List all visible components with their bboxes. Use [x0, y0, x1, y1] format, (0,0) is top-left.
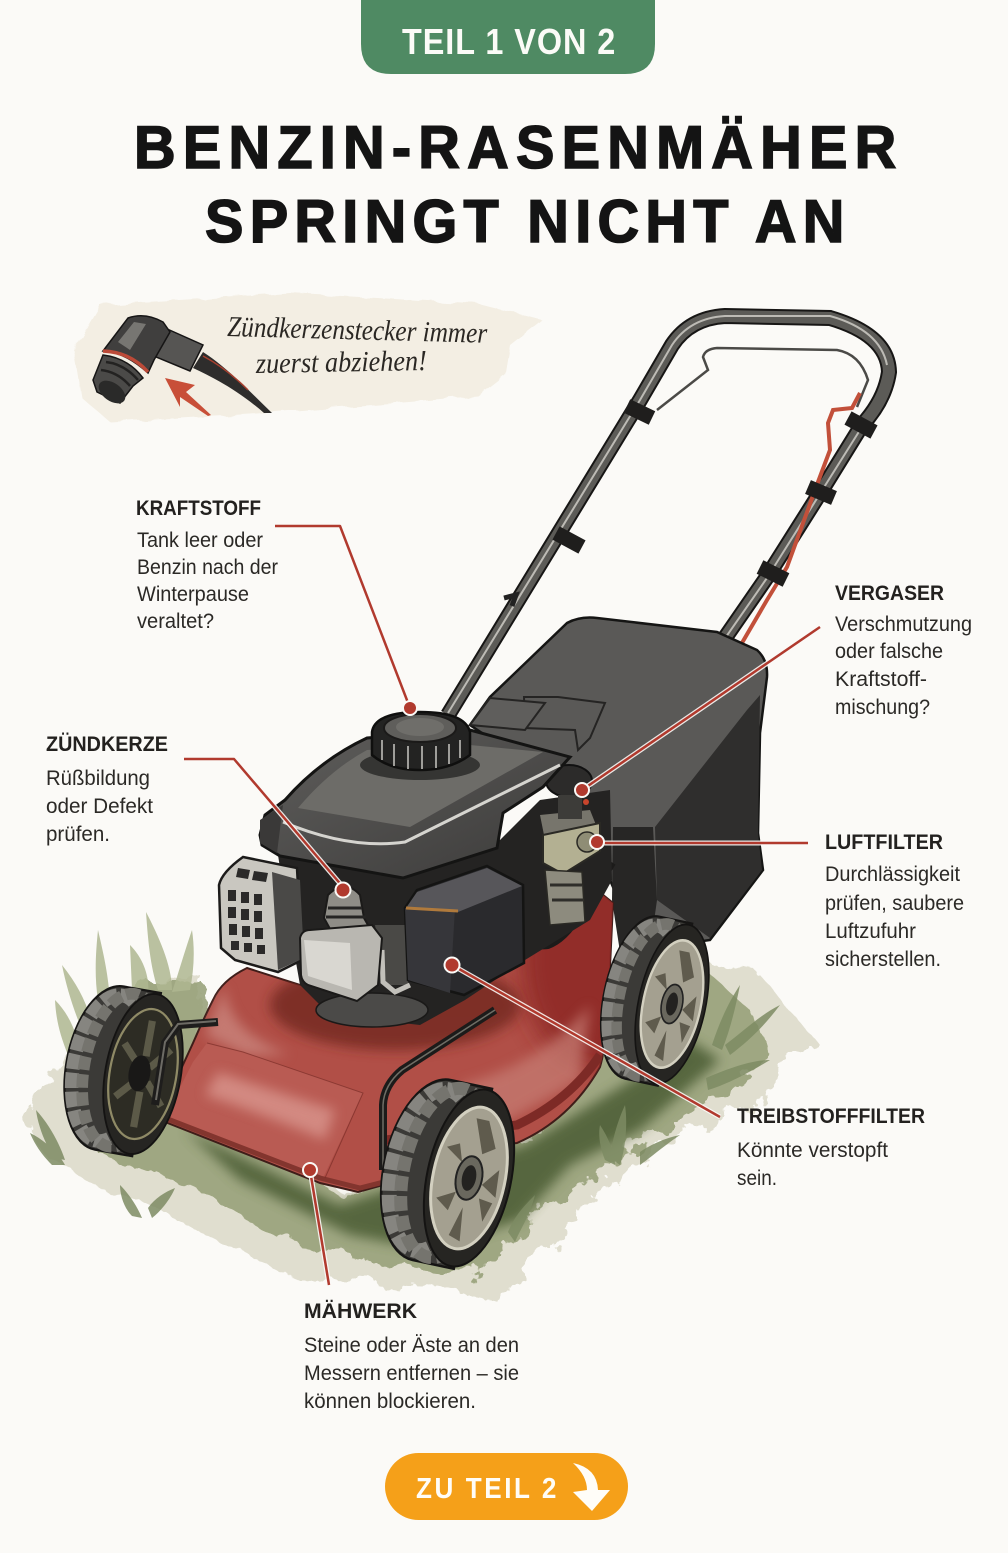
- label: Luftfilter: prüfen, saubere: [825, 892, 964, 915]
- title: [134, 115, 896, 255]
- label: Kraftstoff: Benzin nach der: [137, 556, 278, 579]
- fuel cap: [360, 712, 480, 780]
- leader: Vergaser: [582, 627, 820, 790]
- leader: Zündkerze: [184, 759, 343, 887]
- label: Mähwerk: Messern entfernen – sie: [304, 1362, 519, 1385]
- handle tube: [448, 316, 889, 825]
- label: Zündkerze: Rüßbildung: [46, 767, 150, 790]
- bag side panel: [655, 695, 762, 938]
- handwritten note: zuerst abziehen!: [255, 345, 427, 380]
- title: BENZIN-RASENMÄHER: [134, 115, 896, 181]
- spark plug and ignition block: [300, 886, 382, 1001]
- label: Zündkerze: ZÜNDKERZE: [46, 733, 168, 756]
- label: Kraftstoff: Winterpause: [137, 583, 249, 606]
- illustration: lawn mower: [25, 316, 889, 1300]
- carburetor: [540, 765, 600, 925]
- title: SPRINGT NICHT AN: [205, 189, 844, 255]
- label: Kraftstoff: [136, 497, 278, 633]
- dome shading: [512, 896, 613, 1082]
- banner: part 1 of 2: [361, 0, 655, 74]
- label: Vergaser: Verschmutzung: [835, 613, 972, 636]
- label: Vergaser: Kraftstoff-: [835, 668, 927, 691]
- cable: [193, 352, 272, 413]
- leader: Kraftstoff: [275, 526, 410, 708]
- label: Kraftstoff: veraltet?: [137, 610, 214, 633]
- label: Mähwerk: können blockieren.: [304, 1390, 476, 1413]
- label: Treibstofffilter: TREIBSTOFFFILTER: [737, 1105, 925, 1128]
- label: Mähwerk: Steine oder Äste an den: [304, 1334, 519, 1357]
- icon: curved down arrow: [573, 1463, 610, 1511]
- recoil housing with grille: [219, 857, 304, 972]
- engine: [219, 712, 612, 1027]
- label: Luftfilter: [825, 831, 964, 971]
- black pipes and lever: [383, 1010, 495, 1170]
- grass catcher bag: [470, 618, 767, 965]
- wheels: [52, 909, 722, 1277]
- label: Zündkerze: prüfen.: [46, 823, 110, 846]
- front panel: [170, 1043, 363, 1178]
- label: Luftfilter: Durchlässigkeit: [825, 863, 960, 886]
- leader: Mähwerk: [310, 1170, 329, 1285]
- label: Mähwerk: [304, 1300, 519, 1413]
- banner: part 1 of 2: TEIL 1 VON 2: [402, 22, 615, 62]
- label: Luftfilter: LUFTFILTER: [825, 831, 943, 854]
- mower deck: [167, 862, 616, 1193]
- label: Zündkerze: oder Defekt: [46, 795, 153, 818]
- handwritten note: Zündkerzenstecker immer: [227, 311, 488, 350]
- leader: Luftfilter: [597, 842, 808, 844]
- brush stroke background: [74, 293, 542, 422]
- callout: pull spark plug connector first: [74, 293, 542, 422]
- icon: spark plug connector: [93, 316, 272, 413]
- red cable: [700, 393, 860, 715]
- cable wire loop: [657, 348, 868, 410]
- label: Kraftstoff: KRAFTSTOFF: [136, 497, 261, 520]
- label: Treibstofffilter: sein.: [737, 1167, 777, 1190]
- button: to part 2: [385, 1453, 628, 1520]
- clamps: [556, 406, 874, 580]
- label: Kraftstoff: Tank leer oder: [137, 529, 263, 552]
- engine block: [278, 790, 612, 1025]
- grass patch: [25, 912, 815, 1300]
- label: Zündkerze: [46, 733, 168, 846]
- fuel filter housing: [405, 866, 524, 995]
- bag lid plates: [524, 697, 605, 750]
- engine cover: [260, 730, 570, 878]
- label: Treibstofffilter: Könnte verstopft: [737, 1139, 888, 1162]
- leader: Treibstofffilter: [452, 965, 720, 1117]
- label: Vergaser: oder falsche: [835, 640, 943, 663]
- button: to part 2: ZU TEIL 2: [416, 1472, 556, 1504]
- icon: red arrow: [165, 378, 211, 416]
- handwritten note: [227, 311, 488, 380]
- label: Luftfilter: sicherstellen.: [825, 948, 941, 971]
- handle bars and cable: [448, 316, 889, 825]
- callout leader lines: [184, 526, 820, 1285]
- label: Luftfilter: Luftzufuhr: [825, 920, 916, 943]
- label: Vergaser: mischung?: [835, 696, 930, 719]
- label: Treibstofffilter: [737, 1105, 925, 1190]
- label: Vergaser: [835, 582, 972, 719]
- label: Vergaser: VERGASER: [835, 582, 944, 605]
- label: Mähwerk: MÄHWERK: [304, 1300, 417, 1323]
